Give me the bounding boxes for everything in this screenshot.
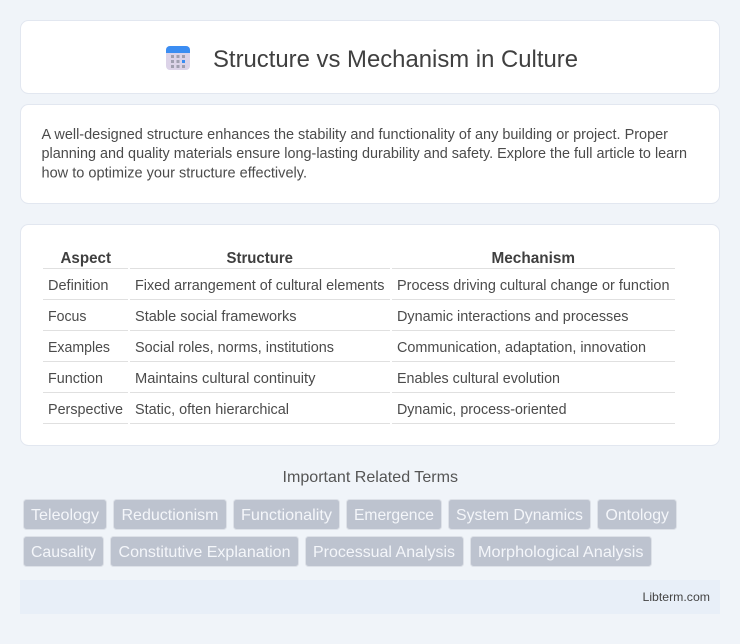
tag: Ontology — [598, 500, 676, 530]
tag: System Dynamics — [448, 500, 590, 530]
heading: related terms: Important Related Terms — [282, 469, 458, 486]
row: examples: Social roles, norms, institutions — [135, 340, 334, 356]
table header: Structure — [226, 250, 293, 267]
panel: header — [20, 20, 720, 94]
row: focus — [48, 309, 628, 325]
row: perspective: Static, often hierarchical — [135, 402, 289, 418]
tag: Causality: Causality — [31, 544, 96, 561]
row: function: Function — [48, 371, 103, 387]
tag: Processual Analysis — [306, 536, 464, 566]
row: examples: Examples — [48, 340, 110, 356]
row: examples: Communication, adaptation, innovation — [397, 340, 646, 356]
title: Structure vs Mechanism in Culture — [213, 46, 578, 73]
tag: Reductionism — [114, 500, 226, 530]
tag: Morphological Analysis: Morphological Analysis — [478, 544, 644, 561]
row: definition: Fixed arrangement of cultural elements — [135, 278, 384, 294]
tag: Reductionism: Reductionism — [122, 507, 218, 524]
table header — [60, 250, 575, 267]
intro text: A well-designed structure enhances the stability and functionality of any building or project. Proper — [42, 127, 668, 143]
tag: System Dynamics: System Dynamics — [456, 507, 583, 524]
tag: Emergence — [346, 500, 442, 530]
row: examples — [48, 340, 646, 356]
intro text: how to optimize your structure effectively. — [42, 166, 307, 182]
row: perspective — [48, 402, 566, 418]
tag: Functionality: Functionality — [241, 507, 332, 524]
tag: Ontology: Ontology — [606, 507, 669, 524]
intro text: planning and quality materials ensure long-lasting durability and safety. Explore the full article to learn — [42, 146, 687, 162]
row: definition: Process driving cultural change or function — [397, 278, 670, 294]
panel: comparison table — [20, 224, 720, 446]
tag: Functionality — [234, 500, 340, 530]
tag: Teleology: Teleology — [31, 507, 99, 524]
tag: Teleology — [24, 500, 106, 530]
related term tags — [24, 500, 676, 566]
tag: Constitutive Explanation: Constitutive Explanation — [118, 544, 290, 561]
row: perspective: Perspective — [48, 402, 123, 418]
row: function: Enables cultural evolution — [397, 371, 560, 387]
row: function — [48, 371, 560, 387]
row: focus: Focus — [48, 309, 86, 325]
tag: Processual Analysis: Processual Analysis — [313, 544, 455, 561]
footer credit: Libterm.com — [642, 590, 710, 604]
table header: Mechanism — [492, 250, 575, 267]
footer — [20, 580, 720, 614]
tag: Constitutive Explanation — [110, 536, 298, 566]
intro text — [42, 127, 687, 182]
row: function: Maintains cultural continuity — [135, 371, 316, 387]
tag: Causality — [24, 536, 104, 566]
row: definition: Definition — [48, 278, 108, 294]
tag: Emergence: Emergence — [354, 507, 434, 524]
row: focus: Stable social frameworks — [135, 309, 296, 325]
row: focus: Dynamic interactions and processes — [397, 309, 628, 325]
tag: Morphological Analysis — [470, 536, 652, 566]
row: perspective: Dynamic, process-oriented — [397, 402, 566, 418]
icon: calendar — [166, 46, 190, 70]
panel: introduction — [20, 104, 720, 204]
table header: Aspect — [60, 250, 112, 267]
row: definition — [48, 278, 670, 294]
